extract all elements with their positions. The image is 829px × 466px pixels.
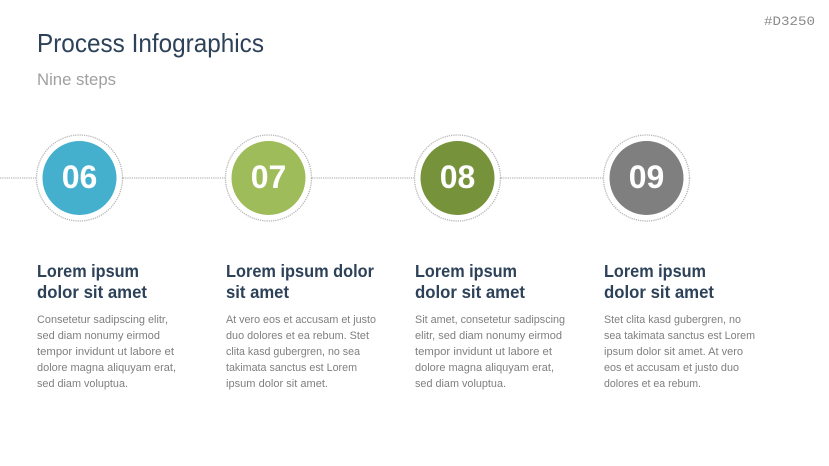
step 07 badge (226, 135, 312, 221)
step 07 heading: Lorem ipsum dolor (226, 261, 374, 281)
step 08 text (415, 261, 565, 390)
step 07 heading: sit amet (226, 282, 289, 302)
step 09 body: Stet clita kasd gubergren, no (604, 314, 741, 326)
step 08 body (415, 314, 565, 390)
step 06 badge (36, 135, 122, 221)
step 07 body: clita kasd gubergren, no sea (226, 346, 361, 358)
step 09 body: ipsum dolor sit amet. At vero (604, 346, 743, 358)
step 09 body: eos et accusam et justo duo (604, 362, 739, 374)
document tag: #D3250 (764, 15, 815, 29)
step 06 body: sed diam voluptua. (37, 378, 128, 390)
step 08 badge: 08 (440, 159, 475, 195)
step 09 body: sea takimata sanctus est Lorem (604, 330, 755, 342)
step 07 body: duo dolores et ea rebum. Stet (226, 330, 369, 342)
step 09 heading: dolor sit amet (604, 282, 714, 302)
step 08 badge (414, 135, 500, 221)
step 09 body: dolores et ea rebum. (604, 378, 701, 390)
step 07 body: takimata sanctus est Lorem (226, 362, 357, 374)
step 09 badge: 09 (629, 159, 664, 195)
step 09 text (604, 261, 755, 390)
step 07 heading (226, 261, 374, 302)
step 07 text (226, 261, 376, 390)
step 09 body (604, 314, 755, 390)
title: Process Infographics (37, 28, 264, 58)
step 06 body: sed diam nonumy eirmod (37, 330, 160, 342)
step 09 heading (604, 261, 714, 302)
step 08 body: Sit amet, consetetur sadipscing (415, 314, 565, 326)
step 06 body: tempor invidunt ut labore et (37, 346, 174, 358)
step 07 badge: 07 (251, 159, 286, 195)
step 09 badge (604, 135, 690, 221)
subtitle: Nine steps (37, 70, 116, 89)
step 06 body: dolore magna aliquyam erat, (37, 362, 176, 374)
step 07 body (226, 314, 376, 390)
step 08 body: sed diam voluptua. (415, 378, 506, 390)
step 07 body: ipsum dolor sit amet. (226, 378, 328, 390)
step 08 heading: dolor sit amet (415, 282, 525, 302)
step 06 heading: Lorem ipsum (37, 261, 139, 281)
step 08 body: dolore magna aliquyam erat, (415, 362, 554, 374)
step 06 heading (37, 261, 147, 302)
timeline connector (0, 177, 603, 179)
step 06 heading: dolor sit amet (37, 282, 147, 302)
step 09 heading: Lorem ipsum (604, 261, 706, 281)
step 06 badge: 06 (62, 159, 97, 195)
step 06 text (37, 261, 176, 390)
step 08 heading (415, 261, 525, 302)
step 07 body: At vero eos et accusam et justo (226, 314, 376, 326)
step 06 body: Consetetur sadipscing elitr, (37, 314, 168, 326)
step 08 heading: Lorem ipsum (415, 261, 517, 281)
step 06 body (37, 314, 176, 390)
step 08 body: elitr, sed diam nonumy eirmod (415, 330, 562, 342)
step 08 body: tempor invidunt ut labore et (415, 346, 552, 358)
